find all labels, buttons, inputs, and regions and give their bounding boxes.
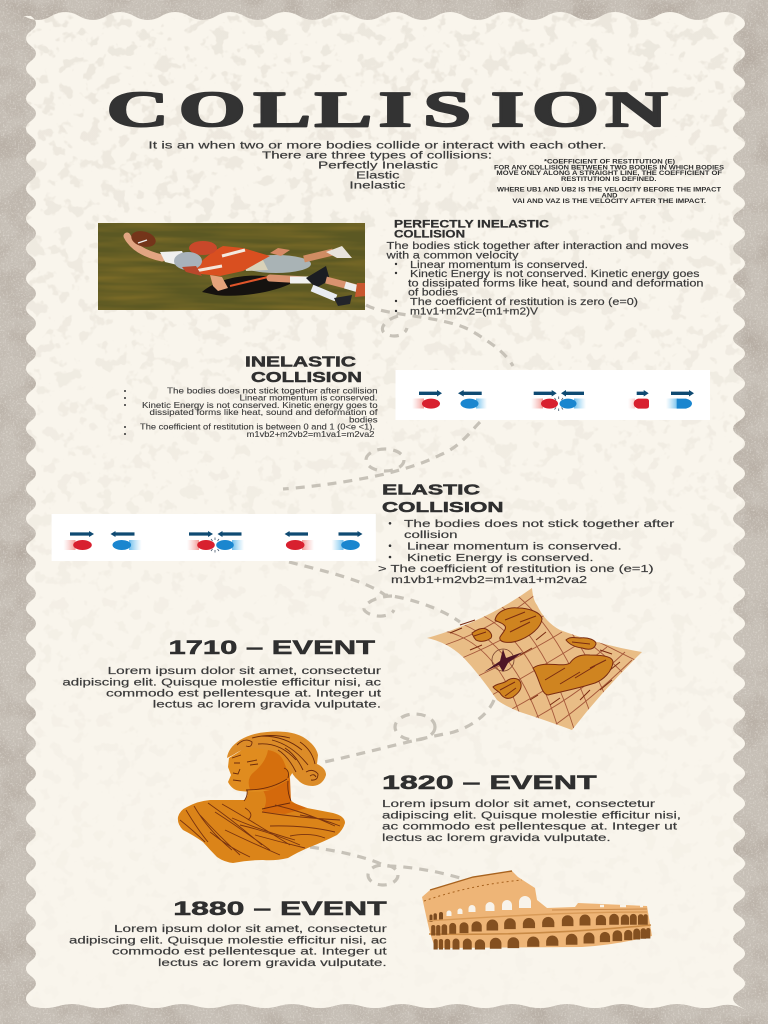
middle arches (432, 914, 647, 935)
text: perfectly inelastic details: Kinetic Energy is not conserved. Kinetic energy goes (410, 269, 700, 280)
map compass (484, 649, 523, 672)
diagram: elastic collision stages (52, 514, 376, 561)
heading: perfectly inelastic collision: COLLISION (394, 229, 465, 241)
text: 1880 event: Lorem ipsum dolor sit amet, consectetur (114, 924, 387, 935)
text: inelastic details: Kinetic Energy is not conserved. Kinetic energy goes to (142, 401, 378, 410)
lower arches (434, 928, 650, 949)
text: 1880 event (69, 924, 387, 969)
text: inelastic details: bodies (349, 415, 378, 424)
text: 1820 event (382, 799, 681, 844)
text: 1880 event: adipiscing elit. Quisque molestie efficitur nisi, ac (69, 936, 387, 946)
text: elastic details: collision (404, 530, 458, 541)
text: perfectly inelastic details: of bodies (408, 288, 458, 299)
intro text block: There are three types of collisions: (262, 151, 492, 162)
text: perfectly inelastic details: Linear momentum is conserved. (410, 260, 588, 271)
text: inelastic details: m1vb2+m2vb2=m1va1=m2va2 (247, 430, 374, 439)
text: 1710 event: commodo est pellentesque at. Integer ut (106, 688, 381, 700)
heading: inelastic collision: INELASTIC (245, 353, 356, 370)
dashed route 3 (289, 562, 460, 622)
dashed route 5 (310, 847, 460, 885)
dashed route 1 (366, 305, 513, 366)
text: inelastic details: The coefficient of restitution is between 0 and 1 (0<e <1). (140, 423, 375, 432)
heading: inelastic collision (245, 353, 362, 386)
upper right wall (552, 909, 647, 910)
coefficient of restitution note: WHERE UB1 AND UB2 IS THE VELOCITY BEFORE THE IMPACT (497, 188, 721, 194)
map grid (446, 596, 635, 728)
text: inelastic details: The bodies does not stick together after collision (167, 386, 378, 395)
coefficient of restitution note: FOR ANY COLLISION BETWEEN TWO BODIES IN WHICH BODIES (494, 166, 724, 172)
text: inelastic details: dissipated forms like heat, sound and deformation of (150, 408, 379, 417)
coefficient of restitution note: *COEFFICIENT OF RESTITUTION (E) (544, 160, 675, 166)
coefficient of restitution note: MOVE ONLY ALONG A STRAIGHT LINE, THE COEFFICIENT OF (496, 171, 722, 177)
diagram: inelastic collision stages (396, 370, 710, 420)
map hatch marks (450, 612, 620, 705)
text: perfectly inelastic details: with a common velocity (385, 250, 519, 261)
intro text block: It is an when two or more bodies collide or interact with each other. (148, 140, 606, 152)
coefficient of restitution note: VAI AND VAZ IS THE VELOCITY AFTER THE IMPACT. (512, 199, 706, 205)
dashed route 4 (320, 700, 494, 763)
text: elastic details: > The coefficient of restitution is one (e=1) (378, 564, 654, 575)
text: perfectly inelastic details: m1v1+m2v2=(m1+m2)V (410, 307, 538, 318)
heading: perfectly inelastic collision (394, 219, 549, 241)
text: perfectly inelastic details (385, 241, 704, 318)
text: elastic details: m1vb1+m2vb2=m1va1+m2va2 (391, 575, 587, 586)
text: 1880 event: commodo est pellentesque at. Integer ut (112, 946, 387, 958)
illustration: classical bust (178, 732, 345, 863)
heading: perfectly inelastic collision: PERFECTLY INELASTIC (394, 219, 549, 231)
text: perfectly inelastic details: The bodies stick together after interaction and moves (386, 241, 688, 252)
photo: football tackle (97, 222, 366, 311)
illustration: treasure map (427, 585, 642, 732)
text: 1820 event: lectus ac lorem gravida vulputate. (382, 833, 611, 844)
intro text block (148, 140, 606, 192)
heading: inelastic collision: COLLISION (251, 369, 362, 386)
text: perfectly inelastic details: to dissipated forms like heat, sound and deformation (408, 278, 704, 289)
heading: elastic collision: COLLISION (382, 499, 504, 516)
coefficient of restitution note: AND (602, 193, 618, 199)
intro text block: Inelastic (349, 181, 405, 192)
upper windows (446, 896, 531, 916)
band lines (429, 925, 651, 934)
text: 1820 event: adipiscing elit. Quisque molestie efficitur nisi, (382, 810, 681, 822)
text: 1710 event: Lorem ipsum dolor sit amet, consectetur (108, 666, 382, 677)
heading: 1710 event: 1710 – EVENT (168, 637, 375, 659)
heading: 1880 event: 1880 – EVENT (173, 898, 387, 920)
text: 1710 event: adipiscing elit. Quisque molestie efficitur nisi, ac (62, 678, 381, 688)
title: COLLISION (106, 82, 668, 138)
heading: 1820 event: 1820 – EVENT (382, 772, 597, 794)
text: elastic details: Linear momentum is conserved. (407, 542, 622, 552)
map islands (472, 608, 613, 698)
text: 1820 event: Lorem ipsum dolor sit amet, consectetur (382, 799, 656, 810)
text: 1820 event: ac commodo est pellentesque at. Integer ut (382, 822, 677, 833)
intro text block: Elastic (356, 171, 400, 182)
intro text block: Perfectly Inelastic (318, 161, 438, 172)
heading: elastic collision (382, 481, 504, 516)
text: elastic details: The bodies does not stick together after (404, 519, 675, 530)
text: 1880 event: lectus ac lorem gravida vulputate. (158, 958, 387, 969)
heading: elastic collision: ELASTIC (382, 481, 480, 498)
text: inelastic details: Linear momentum is conserved. (240, 394, 378, 403)
text: 1710 event: lectus ac lorem gravida vulputate. (153, 700, 381, 710)
coefficient of restitution note (494, 160, 724, 205)
text: elastic details: Kinetic Energy is conserved. (407, 553, 594, 564)
text: 1710 event (62, 666, 382, 710)
text: perfectly inelastic details: The coefficient of restitution is zero (e=0) (410, 297, 638, 308)
dashed route 2 (283, 422, 480, 489)
text: elastic details (378, 519, 675, 586)
illustration: colosseum (422, 871, 652, 949)
text: inelastic details (124, 386, 379, 439)
coefficient of restitution note: RESTITUTION IS DEFINED. (561, 177, 657, 183)
